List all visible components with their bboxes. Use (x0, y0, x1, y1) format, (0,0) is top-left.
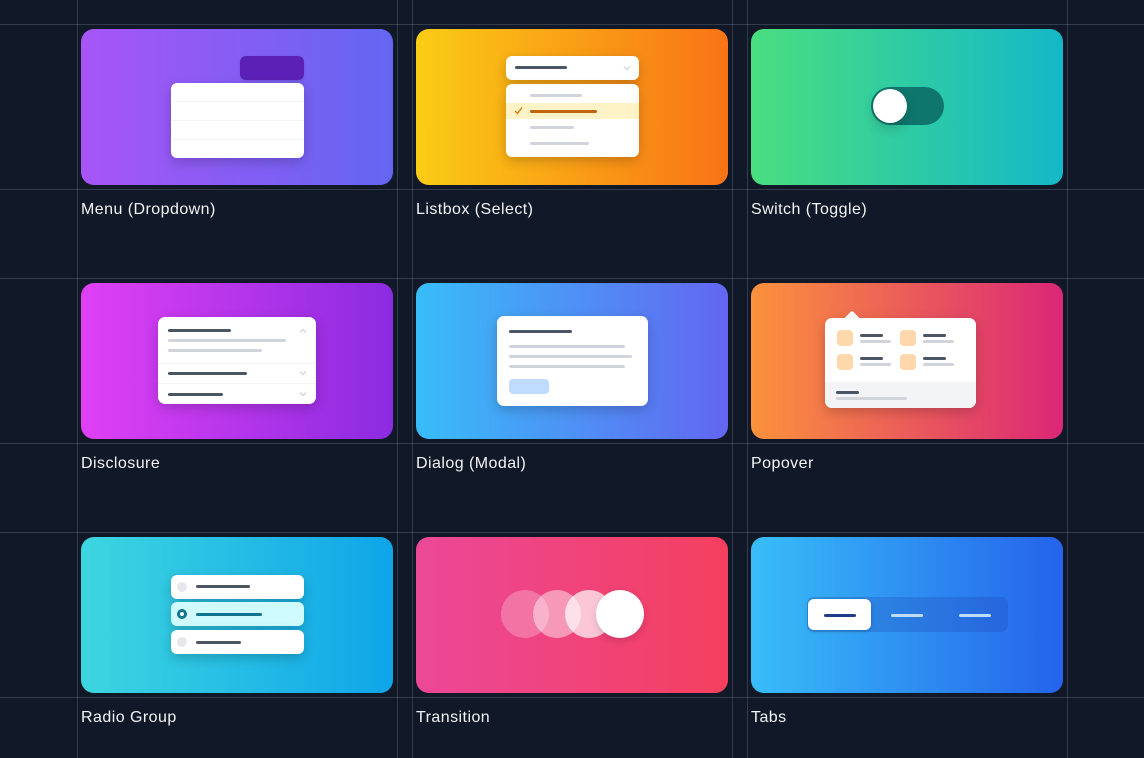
icon: chevron up (300, 328, 306, 333)
popover panel (825, 318, 976, 408)
panel: disclosure card (81, 283, 393, 439)
label: disclosure: Disclosure (81, 455, 160, 472)
panel: dialog modal card (416, 283, 728, 439)
icon: check (514, 107, 522, 114)
panel: menu dropdown card (81, 29, 393, 185)
item 3 (837, 354, 853, 370)
radio option 3 (170, 630, 304, 654)
icon: chevron down (300, 371, 306, 376)
icon: chevron down (624, 66, 630, 70)
label: menu: Menu (Dropdown) (81, 201, 216, 218)
dialog panel (496, 316, 648, 406)
circle 3 (564, 590, 612, 638)
active tab (808, 599, 871, 630)
label: dialog: Dialog (Modal) (416, 455, 526, 472)
menu button (240, 56, 304, 80)
item 4 (900, 354, 916, 370)
label: tabs: Tabs (751, 709, 787, 726)
panel: tabs card (751, 537, 1063, 693)
label: radio group: Radio Group (81, 709, 177, 726)
radio option 2 selected (170, 602, 304, 626)
panel: listbox select card (416, 29, 728, 185)
dialog button (509, 378, 548, 394)
circle 2 (532, 590, 580, 638)
label: popover: Popover (751, 455, 814, 472)
circle 4 (596, 590, 644, 638)
popover arrow (844, 311, 860, 327)
selected option (506, 102, 638, 118)
listbox options (506, 84, 638, 157)
disclosure panel (158, 317, 316, 404)
panel: transition card (416, 537, 728, 693)
popover footer (825, 382, 976, 409)
label: transition: Transition (416, 709, 490, 726)
panel: radio group card (81, 537, 393, 693)
radio option 1 (170, 574, 304, 598)
tab 2 (891, 614, 923, 616)
item 2 (900, 330, 916, 346)
label: listbox: Listbox (Select) (416, 201, 533, 218)
tab list (807, 597, 1008, 632)
icon: chevron down (300, 392, 306, 396)
switch knob (873, 89, 907, 123)
menu panel (170, 83, 304, 158)
label: switch: Switch (Toggle) (751, 201, 867, 218)
panel: popover card (751, 283, 1063, 439)
listbox button (506, 56, 638, 80)
item 1 (837, 330, 853, 346)
circle 1 (500, 590, 548, 638)
panel: switch toggle card (751, 29, 1063, 185)
switch track (871, 87, 944, 125)
tab 3 (958, 614, 990, 616)
